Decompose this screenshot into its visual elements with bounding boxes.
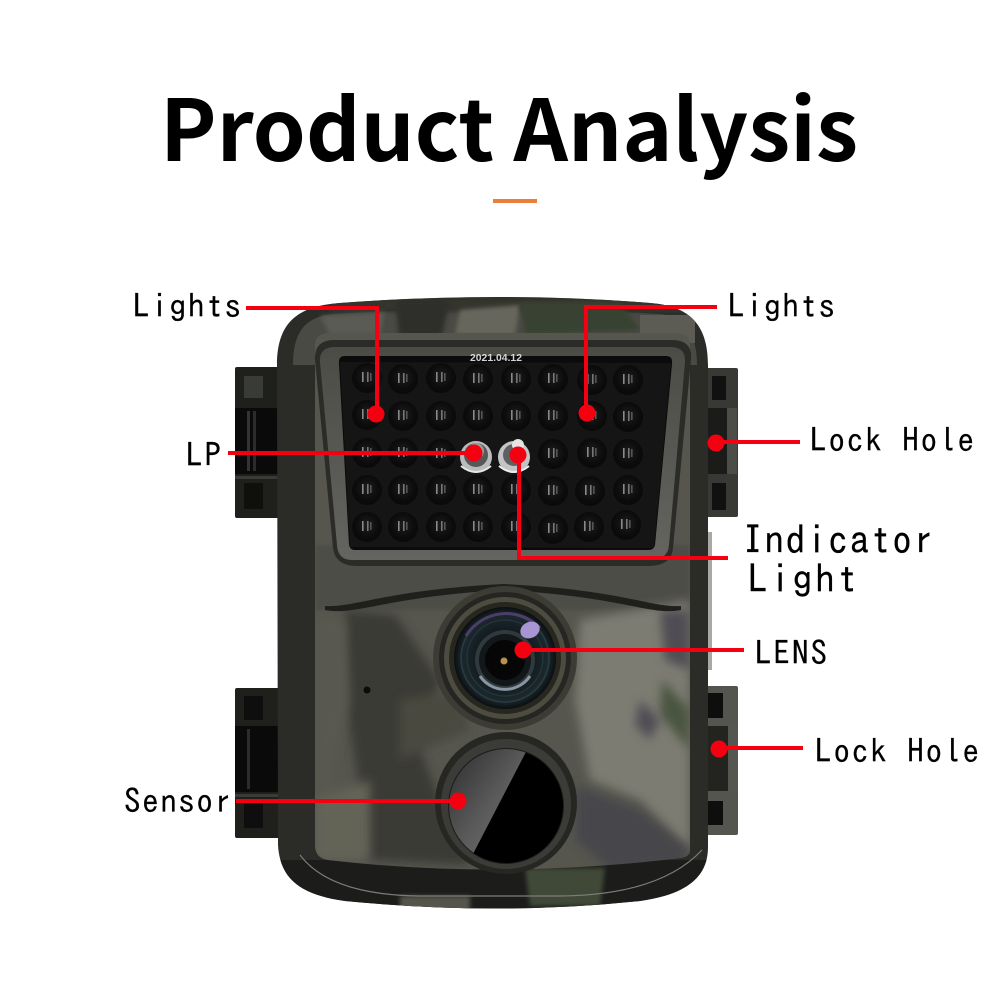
camera lens — [433, 586, 577, 730]
callout: LP: LP — [186, 438, 221, 471]
callout: LENS — [514, 636, 827, 669]
callout: Lights right — [578, 289, 835, 422]
right upper hinge — [700, 368, 738, 517]
brow ridge — [325, 584, 681, 611]
PIR sensor window — [435, 732, 577, 874]
date stamp: 2021.04.12 — [470, 353, 522, 364]
callout: Lights left — [133, 289, 384, 422]
callout: LENS: LENS — [755, 636, 827, 669]
side strip — [708, 532, 712, 670]
callout: Lights right: Lights — [728, 289, 835, 322]
right lower hinge — [700, 686, 738, 835]
camouflage blotches — [315, 545, 690, 870]
callout: Lights left: Lights — [133, 289, 241, 322]
callout: LP — [186, 438, 482, 471]
IR panel window — [339, 356, 672, 550]
camera face with camouflage — [315, 333, 690, 870]
camera body — [277, 297, 708, 908]
microphone hole — [364, 686, 370, 694]
infographic canvas — [125, 92, 978, 908]
light sensor LP — [460, 441, 492, 473]
IR LED array — [352, 363, 643, 544]
indicator light — [498, 439, 530, 473]
callout: Lock Hole upper: Lock Hole — [810, 423, 974, 456]
callout: Sensor — [124, 784, 466, 817]
callout: Lock Hole lower — [710, 734, 979, 767]
left lower hinge — [235, 688, 285, 838]
callout: Sensor: Sensor — [124, 784, 231, 817]
camouflage rim — [277, 298, 717, 915]
callout: Indicator Light: Indicator — [743, 520, 933, 559]
callout: Lock Hole lower: Lock Hole — [815, 734, 979, 767]
camera product — [235, 297, 738, 915]
left upper hinge — [235, 367, 285, 518]
callout: Indicator Light: Light — [748, 559, 857, 598]
IR panel bevel — [320, 347, 685, 560]
callout: Lock Hole upper — [708, 423, 974, 456]
IR panel surround — [315, 340, 691, 566]
orange accent bar — [493, 199, 537, 203]
title: Product Analysis — [160, 63, 858, 186]
callout: Indicator Light — [510, 446, 933, 598]
